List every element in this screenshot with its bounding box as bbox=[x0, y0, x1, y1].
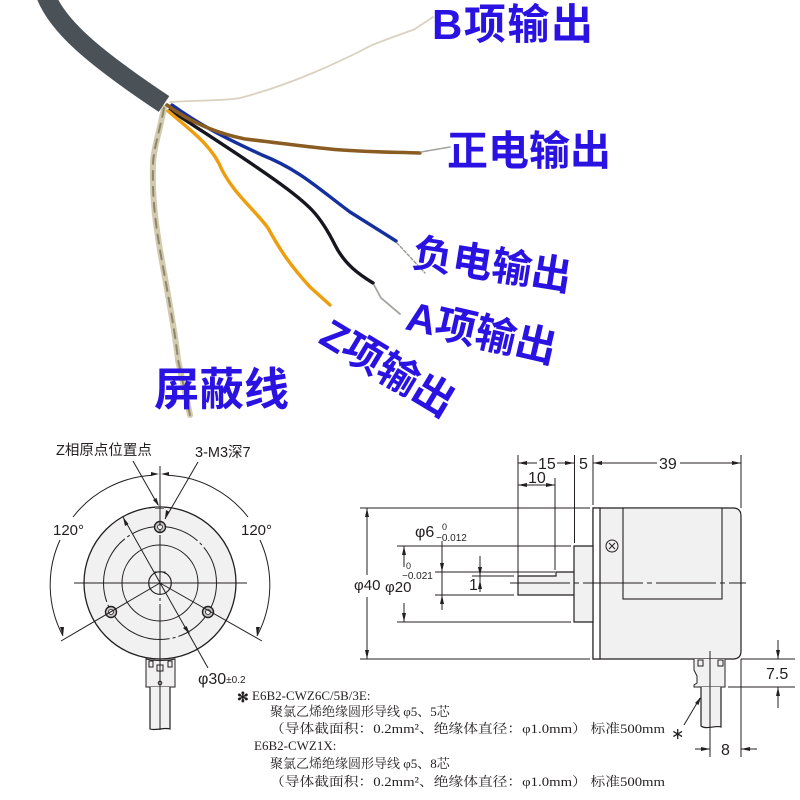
dimension labels: 5 bbox=[579, 456, 588, 473]
heading: Z phase origin: Z相原点位置点 bbox=[56, 442, 152, 459]
dimension labels: 39 bbox=[659, 456, 677, 473]
white wire B bbox=[170, 17, 433, 102]
dimension labels: φ40 bbox=[354, 577, 380, 594]
encoder body bbox=[593, 508, 741, 659]
cable jacket bbox=[46, 0, 164, 104]
cable specification note bbox=[237, 688, 665, 789]
dimension lines bbox=[367, 463, 778, 749]
dimension labels: φ6 bbox=[415, 524, 434, 541]
arrowheads bbox=[365, 461, 780, 751]
120 degree right: 120° bbox=[241, 522, 272, 539]
photo: cable with wires bbox=[46, 0, 450, 415]
label: negative output: 负电输出 bbox=[410, 231, 575, 300]
dimension labels: 0 bbox=[406, 561, 411, 571]
orange wire bbox=[168, 111, 330, 305]
label: Z output: Z项输出 bbox=[312, 310, 463, 426]
connector and cable bbox=[146, 659, 175, 730]
dimension labels: 7.5 bbox=[766, 666, 788, 683]
label: B output: B项输出 bbox=[432, 1, 593, 48]
encoder body circles bbox=[84, 507, 236, 659]
black wire bbox=[170, 110, 373, 283]
cable specification note: E6B2-CWZ1X: bbox=[254, 738, 336, 753]
side view drawing bbox=[354, 455, 795, 759]
cable specification note: ✻ bbox=[237, 689, 249, 705]
cable note marker: ∗ bbox=[671, 726, 684, 743]
cable note marker bbox=[671, 697, 701, 743]
flange and shaft bbox=[518, 546, 593, 622]
brown wire bbox=[167, 105, 420, 153]
label: shield wire: 屏蔽线 bbox=[154, 364, 289, 415]
shield braid wire bbox=[153, 108, 190, 415]
cable specification note: （导体截面积：0.2mm²、绝缘体直径：φ1.0mm） 标准500mm bbox=[270, 721, 665, 736]
center and dimension lines bbox=[50, 461, 270, 700]
dimension labels: 0 bbox=[442, 522, 447, 532]
diameter 30: ±0.2 bbox=[226, 675, 246, 686]
screw holes bbox=[106, 522, 214, 618]
label: 3-M3 depth 7: 3-M3深7 bbox=[195, 444, 251, 461]
lead wire connector bbox=[694, 651, 725, 757]
extension lines bbox=[360, 455, 795, 757]
arrowheads bbox=[60, 472, 260, 636]
dimension labels: 10 bbox=[528, 470, 546, 487]
cable specification note: 聚氯乙烯绝缘圆形导线 φ5、8芯 bbox=[270, 756, 451, 771]
dimension labels: −0.012 bbox=[436, 533, 467, 544]
front view drawing bbox=[50, 442, 272, 730]
cable specification note: （导体截面积：0.2mm²、绝缘体直径：φ1.0mm） 标准500mm bbox=[270, 774, 665, 789]
dimension labels bbox=[354, 456, 788, 759]
dimension labels: 8 bbox=[721, 742, 730, 759]
diameter 30: φ30 bbox=[198, 671, 226, 688]
cable specification note: 聚氯乙烯绝缘圆形导线 φ5、5芯 bbox=[270, 704, 451, 719]
label: A output: A项输出 bbox=[402, 293, 561, 372]
dimension labels: φ20 bbox=[385, 579, 411, 596]
label: positive output: 正电输出 bbox=[447, 128, 611, 174]
dimension labels: 1 bbox=[469, 577, 478, 594]
120 degree left: 120° bbox=[53, 522, 84, 539]
center line bbox=[510, 582, 746, 584]
dimension labels: −0.021 bbox=[402, 571, 433, 582]
cable specification note: E6B2-CWZ6C/5B/3E: bbox=[252, 688, 370, 703]
dimension labels: 15 bbox=[538, 456, 556, 473]
blue wire bbox=[172, 105, 396, 241]
